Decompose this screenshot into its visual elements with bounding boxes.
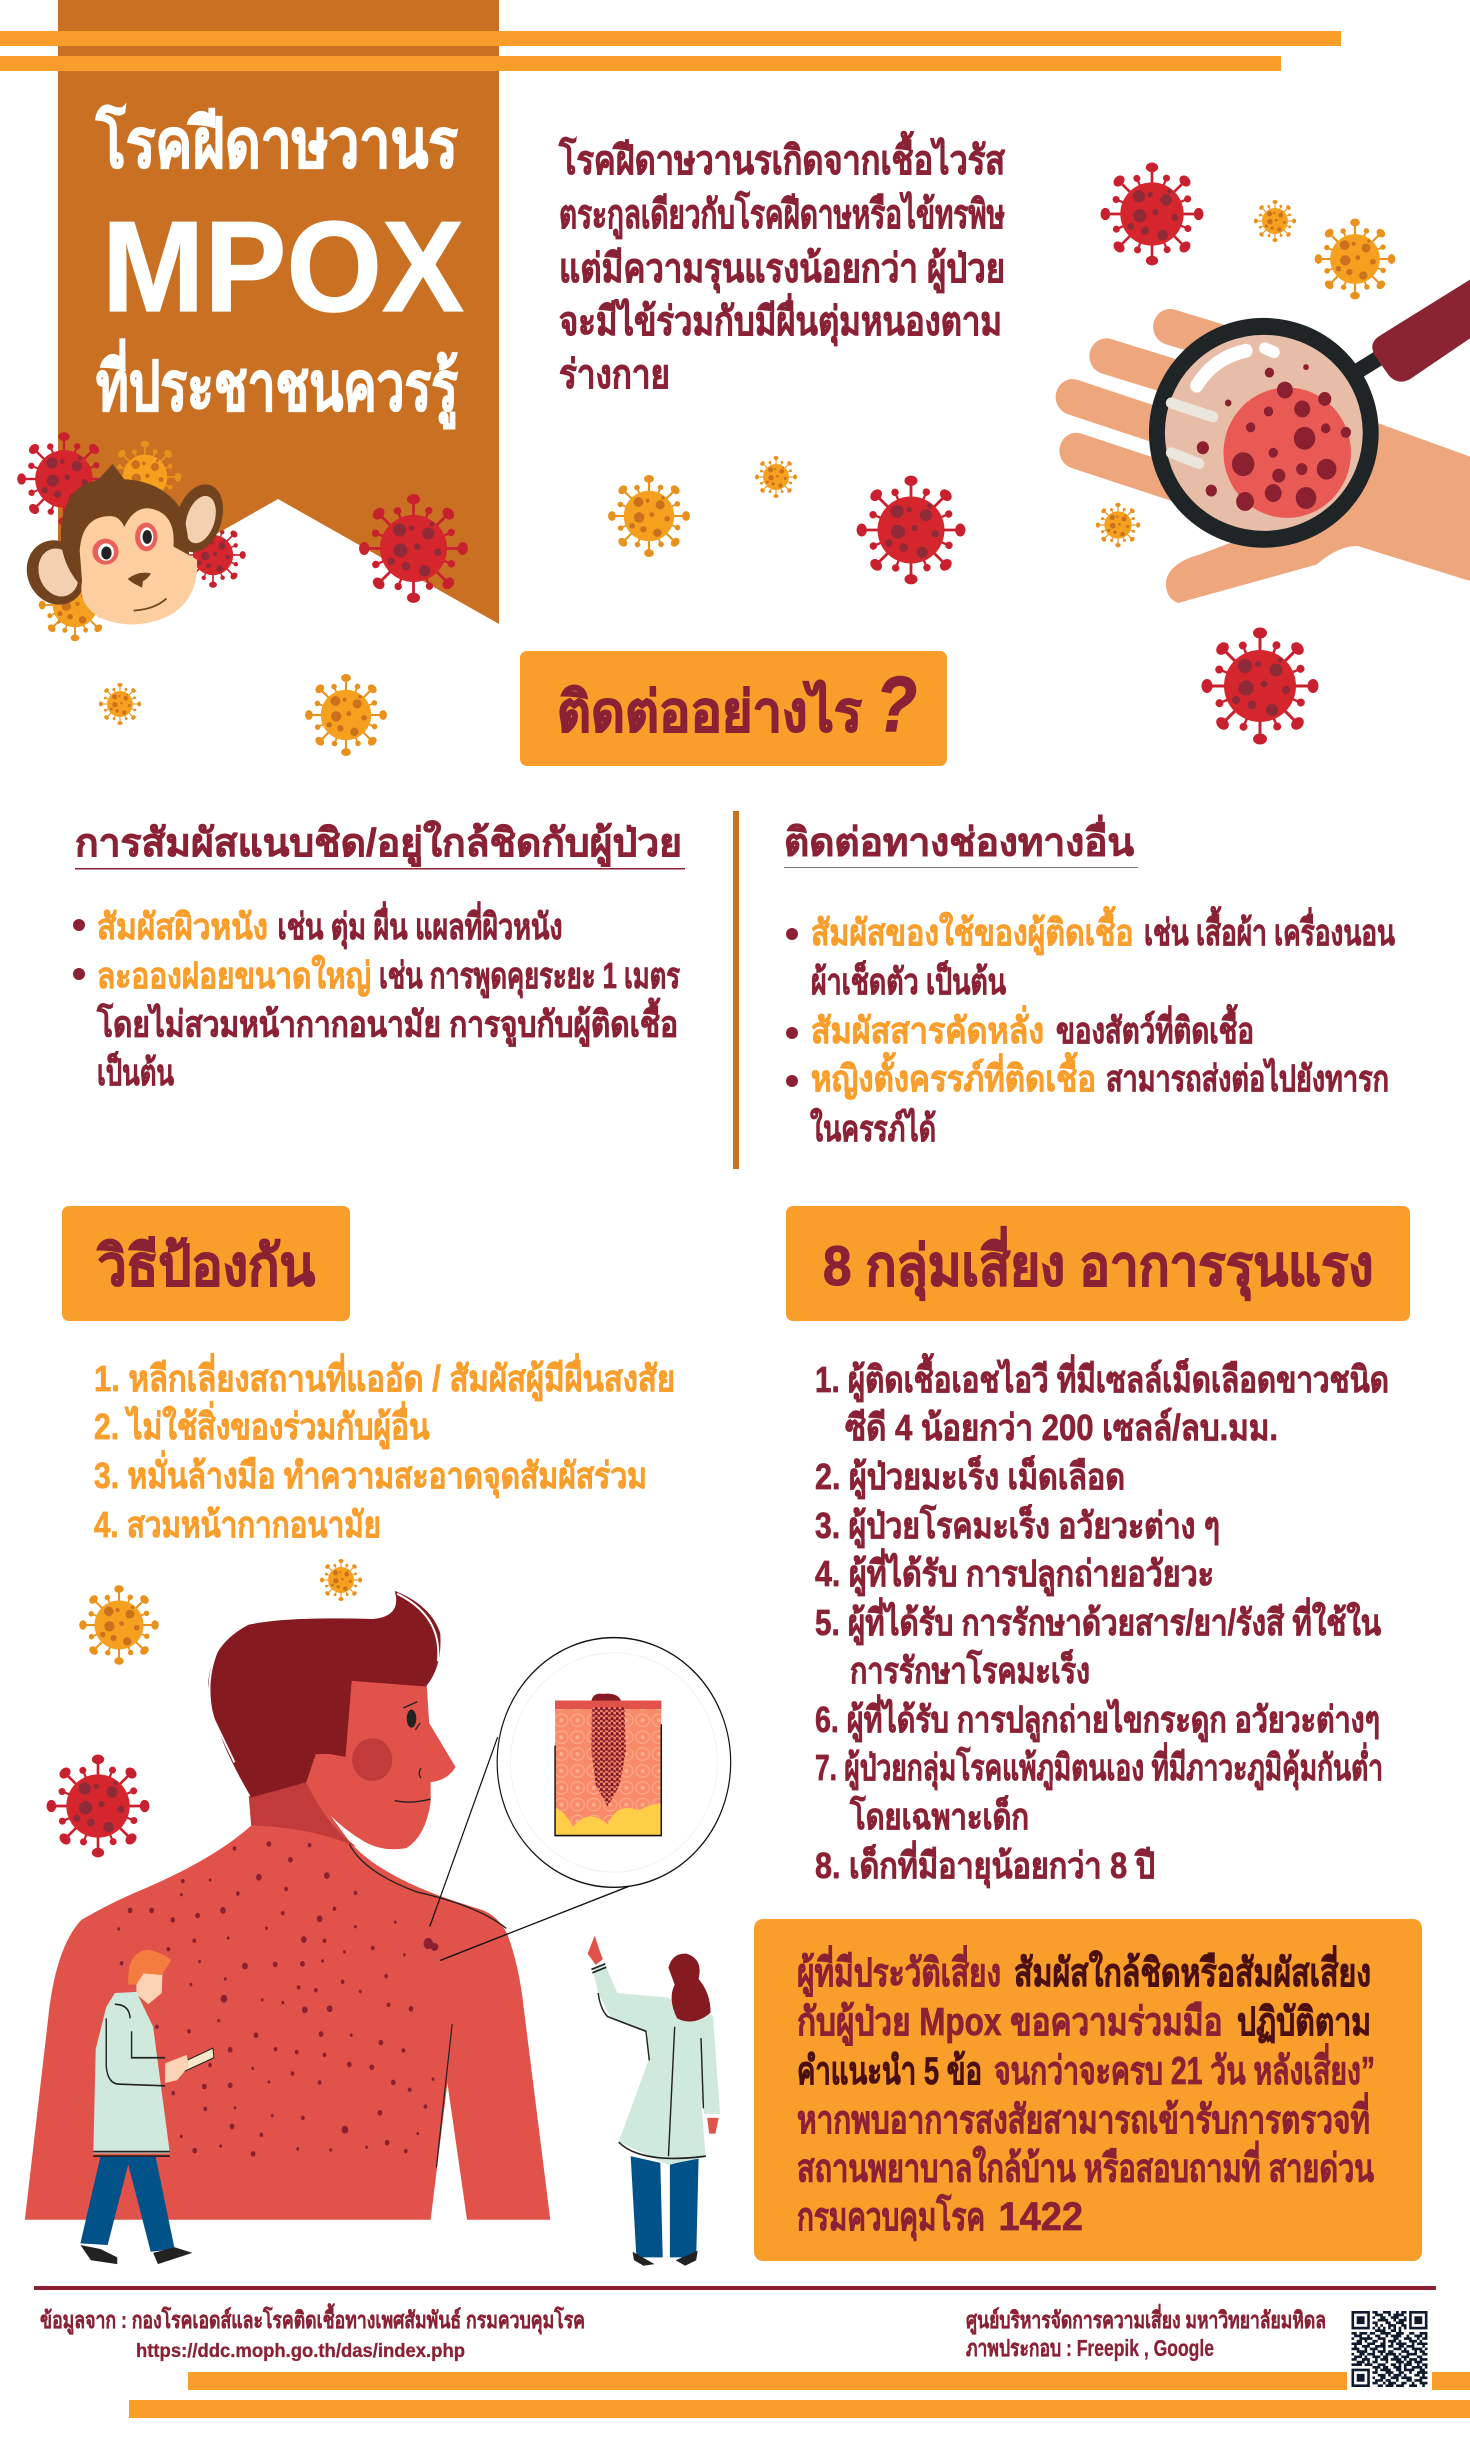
prevention list: 1. หลีกเลี่ยงสถานที่แออัด / สัมผัสผู้มีผื่นสงสัย: [94, 1353, 675, 1402]
footer source text: https://ddc.moph.go.th/das/index.php: [136, 2341, 465, 2362]
panel: other channels: [784, 814, 1395, 1149]
bullet list: other channels: [786, 906, 1395, 1149]
callout box: ผู้ที่มีประวัติเสี่ยง: [797, 1945, 1001, 1997]
callout box: คำแนะนำ 5 ข้อ: [797, 2050, 982, 2093]
risk group list: [815, 1353, 1389, 1889]
doctor left: [80, 1950, 214, 2264]
risk group list: 8. เด็กที่มีอายุน้อยกว่า 8 ปี: [815, 1840, 1155, 1889]
ear: [305, 1711, 332, 1763]
risk group list: 4. ผู้ที่ได้รับ การปลูกถ่ายอวัยวะ: [815, 1548, 1214, 1597]
risk group list: โดยเฉพาะเด็ก: [849, 1794, 1029, 1837]
footer source text: [40, 2303, 585, 2362]
bottom orange stripes: [129, 2372, 1470, 2418]
bullet list: other channels: หญิงตั้งครรภ์ที่ติดเชื้อ: [811, 1052, 1096, 1100]
intro paragraph: ตระกูลเดียวกับโรคฝีดาษหรือไข้ทรพิษ: [559, 191, 1005, 239]
magnifier handle: [1359, 280, 1470, 382]
prevention list: 3. หมั่นล้างมือ ทำความสะอาดจุดสัมผัสร่วม: [94, 1450, 647, 1499]
bullet list: close contact: ละอองฝอยขนาดใหญ่: [97, 954, 371, 997]
vertical divider: [733, 811, 739, 1169]
title line 1: โรคฝีดาษวานร: [95, 104, 458, 182]
risk group list: การรักษาโรคมะเร็ง: [850, 1648, 1090, 1691]
bullet list: other channels: สัมผัสสารคัดหลั่ง: [811, 1005, 1044, 1051]
bullet list: other channels: ผ้าเช็ดตัว เป็นต้น: [811, 959, 1006, 1002]
footer credits: ภาพประกอบ : Freepik , Google: [966, 2335, 1214, 2361]
title MPOX: MPOX: [102, 195, 464, 339]
title banner: [58, 0, 499, 624]
skin spots: [118, 1842, 438, 2156]
bullet list: other channels: ในครรภ์ได้: [810, 1107, 936, 1149]
heading box: prevention: วิธีป้องกัน: [97, 1234, 315, 1297]
intro paragraph: แต่มีความรุนแรงน้อยกว่า ผู้ป่วย: [559, 247, 1005, 294]
illustration: man with rash and doctors: [25, 1591, 731, 2266]
hair: [208, 1591, 441, 1797]
panel: close contact: [73, 820, 685, 1093]
bullet list: other channels: สัมผัสของใช้ของผู้ติดเชื้อ: [811, 906, 1134, 956]
heading box: 8 risk groups: [786, 1206, 1410, 1321]
bullet list: close contact: เช่น การพูดคุยระยะ 1 เมตร: [379, 955, 680, 999]
intro paragraph: [558, 131, 1005, 397]
face: [306, 1672, 456, 1849]
section heading: close contact: การสัมผัสแนบชิด/อยู่ใกล้ชิดกับผู้ป่วย: [75, 820, 682, 867]
callout box: สัมผัสใกล้ชิดหรือสัมผัสเสี่ยง: [1014, 1945, 1371, 1995]
heading box: how it spreads: [520, 651, 947, 766]
illustration: hand with magnifier: [1073, 280, 1470, 603]
intro paragraph: ร่างกาย: [559, 353, 670, 397]
bullet list: close contact: [73, 901, 680, 1093]
virus icons lower area: [47, 1559, 362, 1857]
callout box: กรมควบคุมโรค: [797, 2194, 985, 2241]
title line 3: ที่ประชาชนควรรู้: [96, 338, 458, 430]
neck shadow: [249, 1782, 356, 1847]
heading box: 8 risk groups: 8 กลุ่มเสี่ยง อาการรุนแรง: [823, 1226, 1374, 1301]
callout box: [754, 1919, 1422, 2261]
QR code: [1347, 2304, 1432, 2391]
risk group list: ซีดี 4 น้อยกว่า 200 เซลล์/ลบ.มม.: [845, 1407, 1278, 1448]
heading box: prevention: [62, 1206, 350, 1321]
section heading: other channels: ติดต่อทางช่องทางอื่น: [784, 814, 1134, 864]
callout box: ปฏิบัติตาม: [1237, 2001, 1371, 2044]
heading box: how it spreads: ติดต่ออย่างไร: [557, 679, 862, 743]
callout box: 1422: [998, 2195, 1083, 2239]
virus icons top area: [17, 163, 1395, 756]
icon: monkey: [19, 464, 231, 625]
man's body: [25, 1782, 550, 2220]
footer rule: [34, 2286, 1436, 2290]
prevention list: [94, 1353, 675, 1545]
bullet list: close contact: เช่น ตุ่ม ผื่น แผลที่ผิวหนัง: [278, 901, 562, 950]
callout zoom lens: [430, 1638, 731, 1960]
risk group list: 3. ผู้ป่วยโรคมะเร็ง อวัยวะต่าง ๆ: [815, 1503, 1220, 1549]
intro paragraph: โรคฝีดาษวานรเกิดจากเชื้อไวรัส: [558, 131, 1005, 183]
doctor right: [588, 1936, 720, 2266]
top orange stripes: [0, 31, 1341, 71]
prevention list: 4. สวมหน้ากากอนามัย: [94, 1504, 381, 1545]
footer credits: [966, 2303, 1326, 2361]
footer credits: ศูนย์บริหารจัดการความเสี่ยง มหาวิทยาลัยมหิดล: [966, 2303, 1326, 2335]
lens: [1157, 326, 1371, 539]
prevention list: 2. ไม่ใช้สิ่งของร่วมกับผู้อื่น: [94, 1401, 430, 1450]
bullet list: close contact: โดยไม่สวมหน้ากากอนามัย การจูบกับผู้ติดเชื้อ: [96, 998, 678, 1048]
intro paragraph: จะมีไข้ร่วมกับมีผื่นตุ่มหนองตาม: [559, 293, 1002, 347]
bullet list: close contact: สัมผัสผิวหนัง: [97, 906, 268, 947]
footer source text: ข้อมูลจาก : กองโรคเอดส์และโรคติดเชื้อทางเพศสัมพันธ์ กรมควบคุมโรค: [40, 2303, 585, 2335]
bullet list: close contact: เป็นต้น: [97, 1050, 174, 1093]
cheek and features: [209, 1594, 506, 2167]
callout box: กับผู้ป่วย Mpox ขอความร่วมมือ: [797, 2001, 1222, 2046]
risk group list: 2. ผู้ป่วยมะเร็ง เม็ดเลือด: [815, 1454, 1125, 1500]
title text: [95, 104, 464, 430]
bullet list: other channels: ของสัตว์ที่ติดเชื้อ: [1056, 1004, 1254, 1051]
hand: [1073, 327, 1470, 603]
heading box: how it spreads: ?: [876, 660, 917, 748]
